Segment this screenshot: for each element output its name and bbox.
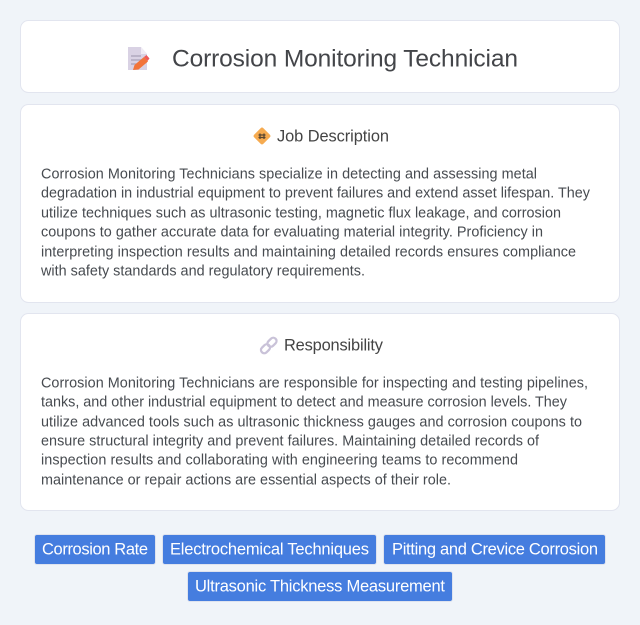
tag: ultrasonic thickness measurement: Ultrasonic Thickness Measurement (195, 578, 445, 596)
text block: job description: degradation in industrial equipment to prevent failures and extend asset lifespan. They (41, 186, 591, 202)
tag: electrochemical techniques (162, 534, 376, 564)
panel: title card (20, 20, 620, 92)
text block: job description (40, 166, 591, 280)
heading: job description: Job Description (277, 128, 389, 146)
text block: responsibility: Corrosion Monitoring Technicians are responsible for inspecting and testing pipelines, (41, 376, 588, 392)
tag: corrosion rate (34, 534, 156, 564)
tag: ultrasonic thickness measurement (188, 572, 452, 602)
heading: responsibility: Responsibility (284, 336, 384, 354)
icon: document with pencil (128, 47, 150, 70)
text block: responsibility: utilize advanced tools such as ultrasonic thickness gauges and corrosion coupons to (41, 414, 582, 430)
text block: responsibility (41, 376, 588, 488)
text block: job description: coupons to gather accurate data for evaluating material integrity. Proficiency in (41, 224, 543, 240)
text block: responsibility: inspection results and collaborating with engineering teams to recommend (41, 452, 518, 468)
tag: pitting and crevice corrosion: Pitting and Crevice Corrosion (392, 540, 598, 558)
text block: job description: utilize techniques such as ultrasonic testing, magnetic flux leakage, and corrosion (41, 206, 561, 222)
tag: pitting and crevice corrosion (384, 534, 606, 564)
panel: job description (20, 104, 620, 302)
tag: corrosion rate: Corrosion Rate (42, 540, 148, 558)
text block: responsibility: tanks, and other industrial equipment to detect and measure corrosion levels. They (41, 394, 568, 410)
icon: link (260, 336, 278, 355)
text block: responsibility: maintenance or repair actions are essential aspects of their role. (41, 472, 451, 488)
tag: electrochemical techniques: Electrochemical Techniques (170, 540, 369, 558)
text block: job description: interpreting inspection results and maintaining detailed records ensures compliance (41, 244, 576, 260)
text block: job description: with safety standards and regulatory requirements. (40, 264, 365, 280)
panel: responsibility (20, 314, 620, 510)
text block: responsibility: ensure structural integrity and prevent failures. Maintaining detailed records of (41, 434, 540, 450)
text block: job description: Corrosion Monitoring Technicians specialize in detecting and assessing metal (41, 166, 537, 182)
title: Corrosion Monitoring Technician (172, 46, 518, 72)
icon: construction diamond (253, 127, 271, 145)
